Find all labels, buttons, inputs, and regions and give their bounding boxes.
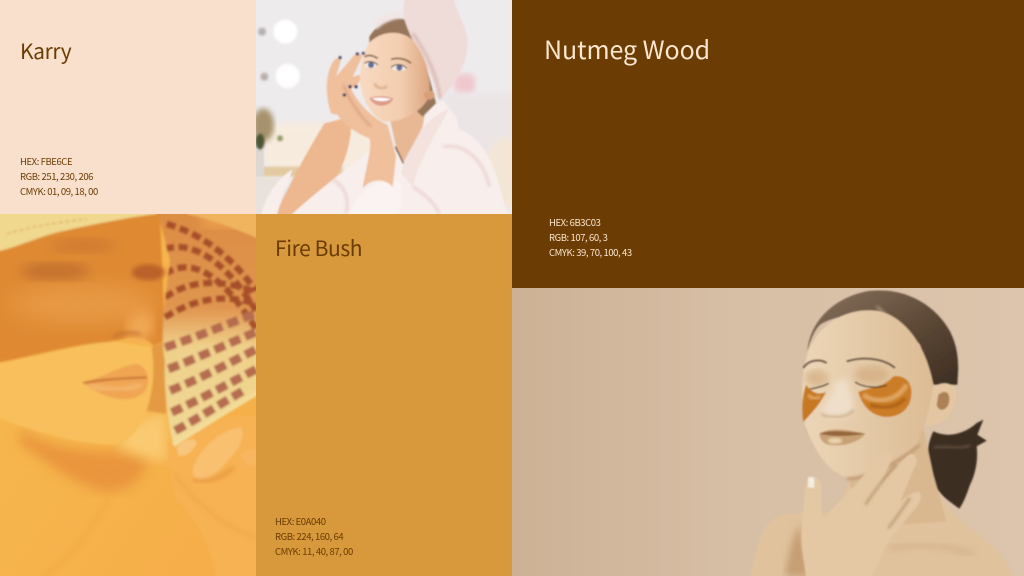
nose (822, 378, 854, 418)
ponytail (928, 420, 987, 509)
heading: Fire Bush: Fire Bush (275, 233, 362, 263)
photo: woman with gold under-eye patches (512, 288, 1024, 576)
text block: Nutmeg Wood colour codes: CMYK: 39, 70, 100, 43 (549, 245, 632, 259)
hand (801, 452, 921, 576)
eyes (20, 263, 90, 280)
text block: Karry colour codes (20, 154, 98, 198)
towel (403, 0, 468, 100)
text block: Fire Bush colour codes: RGB: 224, 160, 64 (275, 529, 343, 543)
text block: Karry colour codes: CMYK: 01, 09, 18, 00 (20, 184, 98, 198)
eyes and brows (364, 55, 411, 63)
neck (389, 107, 426, 163)
text block: Nutmeg Wood colour codes (549, 215, 632, 259)
photo: woman in towel and bathrobe (256, 0, 512, 214)
text block: Fire Bush colour codes: HEX: E0A040 (275, 514, 326, 528)
text block: Nutmeg Wood colour codes: RGB: 107, 60, 3 (549, 230, 607, 244)
jaw shadow (847, 445, 920, 479)
weave marks, light rows (165, 311, 263, 431)
eyelids and brows (805, 370, 828, 386)
lips (369, 96, 393, 106)
panel: Nutmeg Wood swatch (512, 0, 1024, 288)
face (360, 33, 430, 122)
text block: Nutmeg Wood colour codes: HEX: 6B3C03 (549, 215, 600, 229)
plant (253, 108, 274, 142)
ear (925, 383, 957, 426)
lips (83, 364, 148, 399)
text block: Fire Bush colour codes (275, 514, 353, 558)
robe (259, 100, 509, 220)
heading: Nutmeg Wood: Nutmeg Wood (544, 31, 710, 67)
hat brim underside (158, 214, 256, 443)
lips (819, 429, 865, 445)
nose (374, 83, 387, 89)
hands (327, 53, 396, 188)
shoulders (749, 475, 1017, 576)
weave marks, shaded rows (165, 224, 256, 329)
upper face shadow (0, 211, 165, 364)
hair (807, 290, 958, 385)
photo: woman in straw hat, orange duotone (0, 214, 256, 576)
lower face (0, 341, 153, 445)
nose (113, 332, 140, 338)
near arm (273, 117, 351, 220)
eye patches (858, 376, 911, 417)
hat brim top (0, 204, 157, 253)
face (802, 310, 933, 477)
text block: Fire Bush colour codes: CMYK: 11, 40, 87, 00 (275, 544, 353, 558)
panel: Karry swatch (0, 0, 256, 214)
neck (848, 428, 947, 528)
hair (369, 18, 436, 117)
text block: Karry colour codes: RGB: 251, 230, 206 (20, 169, 93, 183)
hand (168, 415, 267, 576)
heading: Karry: Karry (20, 36, 71, 66)
neck shadow (20, 427, 147, 491)
panel: Fire Bush swatch (256, 214, 512, 576)
text block: Karry colour codes: HEX: FBE6CE (20, 154, 72, 168)
